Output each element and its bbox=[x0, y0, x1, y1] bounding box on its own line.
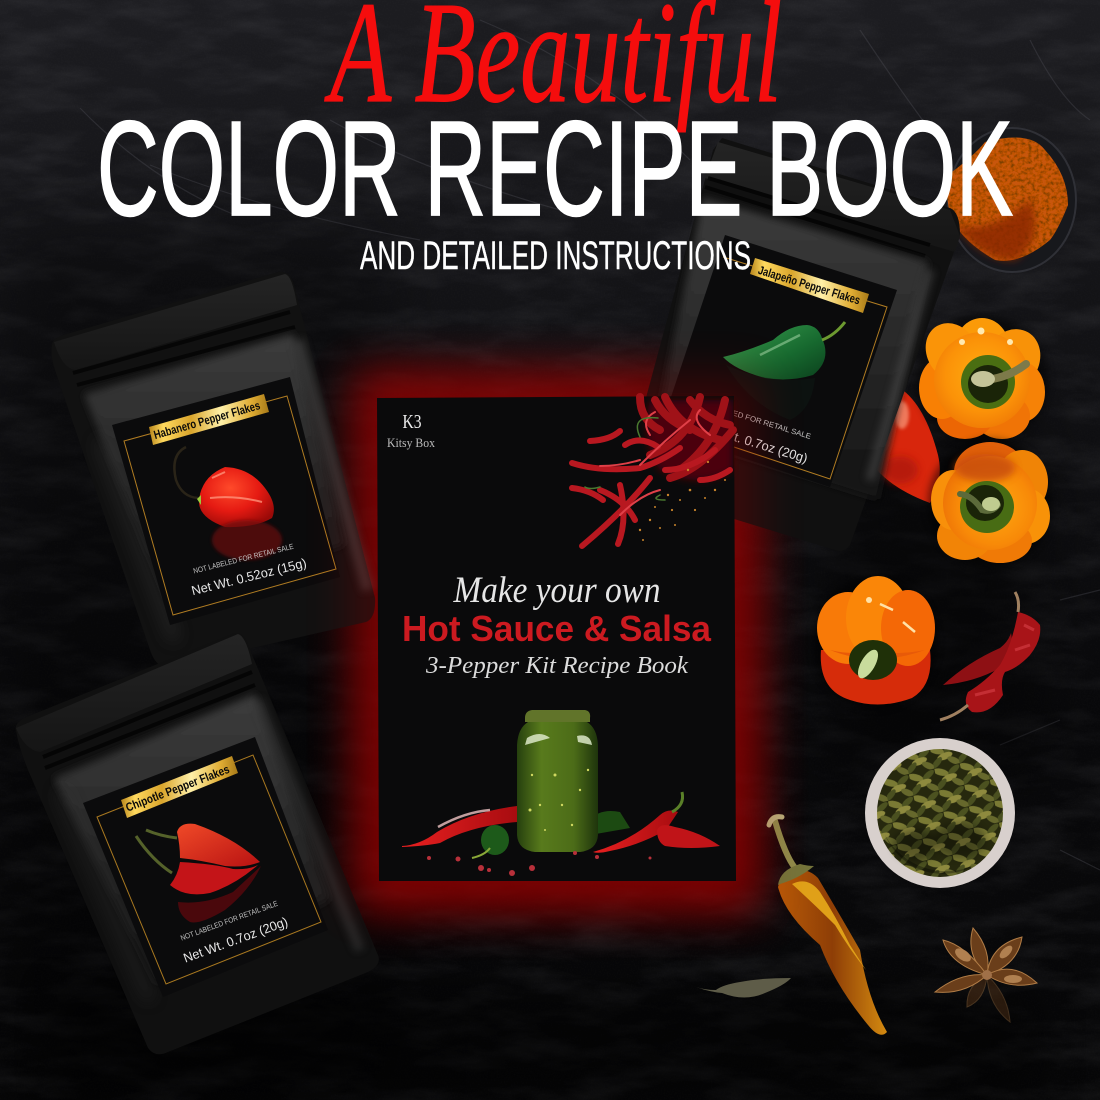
white bowl of seeds bbox=[865, 738, 1015, 888]
red glow behind the book bbox=[356, 372, 760, 912]
book subtitle: 3-Pepper Kit Recipe Book bbox=[425, 653, 688, 679]
habanero label: Habanero Pepper Flakes bbox=[152, 398, 262, 442]
star anise bbox=[935, 928, 1037, 1022]
dried red chilies bbox=[940, 592, 1040, 720]
pouch: chipotle pepper flakes bbox=[16, 633, 379, 1054]
book title: hot sauce and salsa: Hot Sauce & Salsa bbox=[402, 608, 712, 649]
jalapeño label: NOT LABELED FOR RETAIL SALE bbox=[690, 396, 812, 441]
habanero label: NOT LABELED FOR RETAIL SALE bbox=[192, 542, 294, 575]
illustration: flying dried chilies bbox=[572, 397, 733, 546]
jalapeño label bbox=[660, 235, 897, 487]
orange pepper middle bbox=[928, 439, 1052, 567]
orange chili pepper bbox=[769, 817, 887, 1035]
recipe book cover bbox=[377, 396, 736, 881]
jalapeño label: Net Wt. 0.7oz (20g) bbox=[698, 419, 810, 466]
orange pepper top bbox=[915, 314, 1051, 444]
logo: Kitsy Box: K3 bbox=[402, 411, 422, 433]
chipotle label: Chipotle Pepper Flakes bbox=[124, 762, 232, 815]
pouch: habanero pepper flakes bbox=[51, 272, 375, 668]
jalapeño label: Jalapeño Pepper Flakes bbox=[756, 263, 862, 307]
book title: make your own: Make your own bbox=[453, 570, 660, 611]
habanero label bbox=[112, 377, 340, 625]
chipotle label: NOT LABELED FOR RETAIL SALE bbox=[179, 899, 279, 942]
logo: Kitsy Box bbox=[387, 411, 436, 450]
chili flecks bbox=[639, 461, 726, 541]
pouch: jalapeño pepper flakes bbox=[640, 138, 960, 551]
bay leaf bbox=[696, 978, 791, 998]
spice bowl with paprika bbox=[947, 127, 1077, 273]
chipotle label: Net Wt. 0.7oz (20g) bbox=[181, 914, 290, 966]
subtitle: AND DETAILED INSTRUCTIONS bbox=[360, 234, 751, 278]
illustration: salsa jar with chilies bbox=[402, 710, 720, 876]
logo: Kitsy Box: Kitsy Box bbox=[387, 436, 436, 450]
orange-red pepper lower bbox=[813, 576, 937, 708]
red glow over pouch edges bbox=[350, 375, 760, 905]
chipotle label bbox=[83, 737, 328, 997]
habanero label: Net Wt. 0.52oz (15g) bbox=[190, 555, 308, 598]
red pepper behind the jalapeño pouch bbox=[877, 388, 940, 503]
